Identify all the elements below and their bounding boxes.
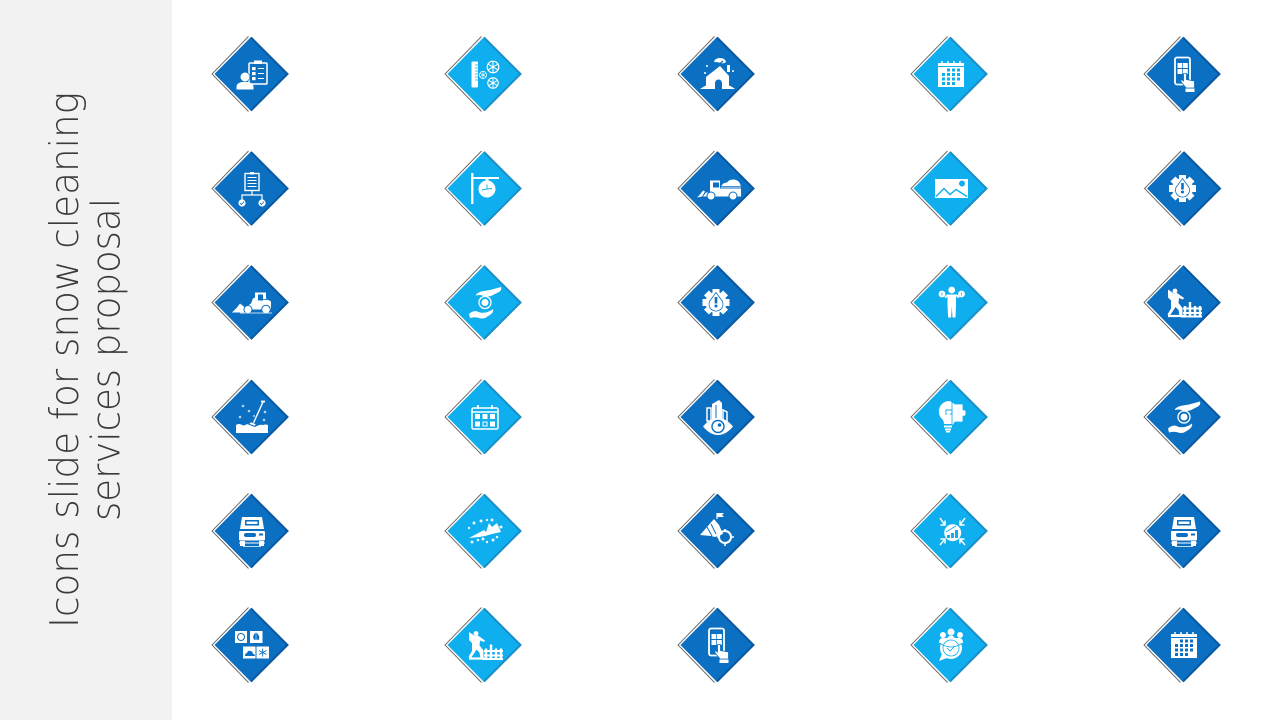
icon tile: truck front view [212, 494, 288, 568]
title: services proposal [84, 198, 130, 521]
icon tile: phone with tapping hand [678, 608, 754, 682]
icon tile: snow covered house [678, 36, 754, 112]
icon tile: snow plow truck side view [678, 151, 754, 226]
icon tile: light bulb with puzzle piece [911, 380, 987, 454]
icon tile: phone with tapping hand [1144, 36, 1220, 112]
icon tile: arrows converging on chart [911, 494, 987, 568]
icon tile: thermometer and snowflakes [445, 36, 521, 112]
icon tile: calendar outline [445, 380, 521, 454]
icon tile: image placeholder [911, 151, 987, 226]
icon tile: gear with warning drop [678, 265, 754, 340]
icon tile: snowy mountain [445, 494, 521, 568]
icon tile: person balancing choices [911, 265, 987, 340]
icon tile: shovel in snow [212, 380, 288, 454]
icon tile: four seasons [212, 608, 288, 682]
icon tile: hands with coin [445, 265, 521, 340]
icon tile: hands with coin [1144, 380, 1220, 454]
panel: title sidebar [0, 0, 172, 720]
icon tile: hanging sign clock [445, 151, 521, 226]
icon tile: truck front view [1144, 494, 1220, 568]
icon tile: person walking by fence [445, 608, 521, 682]
icon tile: clipboard with person [212, 36, 288, 112]
title: Icons slide for snow cleaning [43, 92, 88, 628]
icon tile: group with speech bubble [911, 608, 987, 682]
icon tile: calendar [911, 36, 987, 112]
icon tile: gear with warning drop [1144, 151, 1220, 226]
title [43, 92, 130, 628]
icon tile: clipboard flow chart [212, 151, 288, 226]
icon tile: person walking by fence [1144, 265, 1220, 340]
icon tile: calendar [1144, 608, 1220, 682]
icon tile: mountain flag and target [678, 494, 754, 568]
icon tile: eye and city buildings [678, 380, 754, 454]
icon tile: plow vehicle [212, 265, 288, 340]
